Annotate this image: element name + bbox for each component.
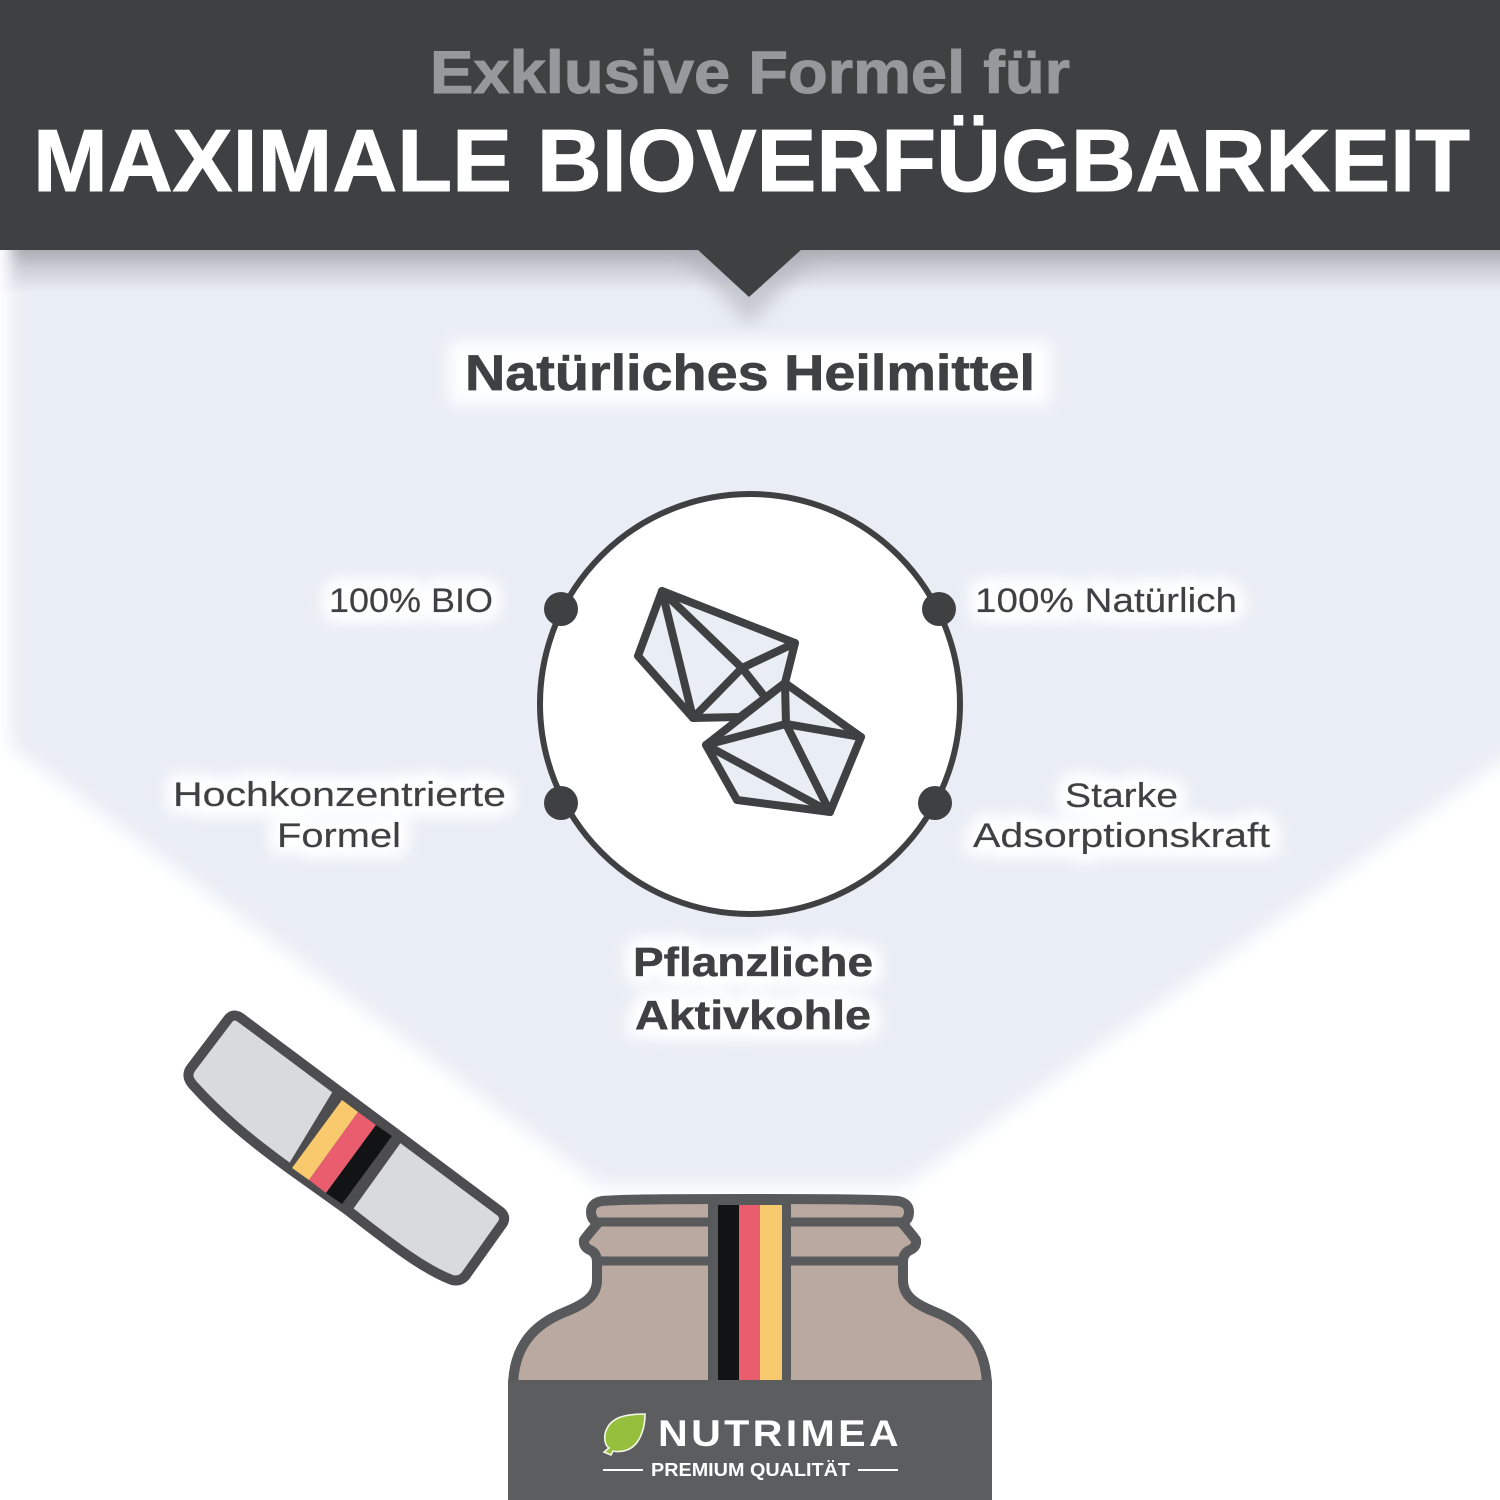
marker dots xyxy=(544,592,956,820)
label: Pflanzliche Aktivkohle xyxy=(633,939,873,1038)
light beam background xyxy=(10,240,1500,1185)
label: Hochkonzentrierte Formel: Hochkonzentrierte xyxy=(173,776,506,814)
jar neck rings xyxy=(597,1222,903,1261)
jar xyxy=(508,1199,992,1500)
label: 100% Natürlich: 100% Natürlich xyxy=(975,582,1237,620)
jar flag stripes xyxy=(708,1199,791,1385)
header pointer arrow xyxy=(697,249,802,297)
tagline: PREMIUM QUALITÄT xyxy=(651,1460,850,1480)
subheading: Natürliches Heilmittel: Natürliches Heilmittel xyxy=(465,345,1035,401)
icon: charcoal crystals xyxy=(638,591,861,812)
label: 100% BIO: 100% BIO xyxy=(329,582,493,620)
label: Starke Adsorptionskraft: Adsorptionskraft xyxy=(973,817,1271,855)
icon: green leaf xyxy=(604,1414,645,1455)
label: Hochkonzentrierte Formel: Formel xyxy=(277,817,401,855)
header banner xyxy=(0,0,1500,297)
lid flag stripes xyxy=(287,1091,402,1212)
circle panel with crystal icon xyxy=(540,494,960,914)
label: Pflanzliche Aktivkohle: Aktivkohle xyxy=(635,992,871,1038)
heading line 1: Exklusive Formel für xyxy=(430,39,1070,106)
label: Pflanzliche Aktivkohle: Pflanzliche xyxy=(633,939,873,985)
jar lid xyxy=(188,1016,504,1280)
jar label xyxy=(508,1380,992,1500)
label: Starke Adsorptionskraft xyxy=(973,777,1271,855)
jar body xyxy=(513,1199,987,1500)
label: Hochkonzentrierte Formel xyxy=(173,776,506,855)
brand name: NUTRIMEA xyxy=(658,1413,902,1454)
label: Starke Adsorptionskraft: Starke xyxy=(1065,777,1178,815)
heading line 2: MAXIMALE BIOVERFÜGBARKEIT xyxy=(33,111,1470,210)
